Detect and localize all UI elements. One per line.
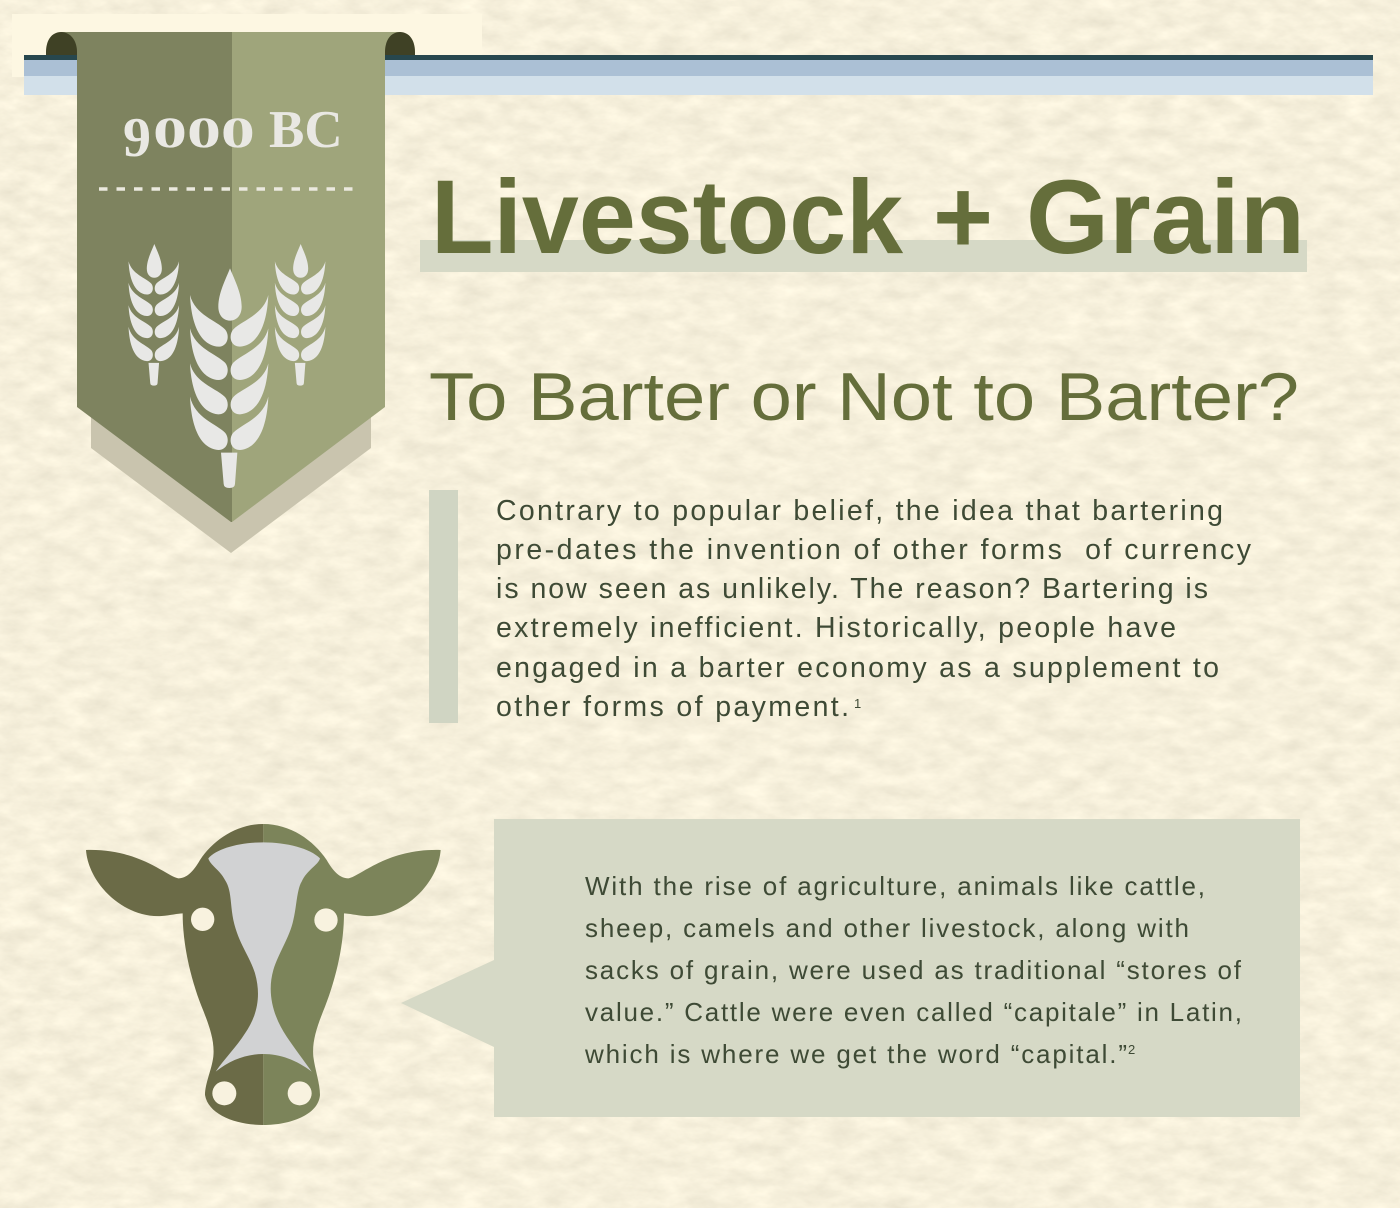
date label: 000 — [153, 109, 255, 157]
banner shadow — [91, 400, 371, 553]
date label: 9 — [123, 107, 151, 169]
title: + — [933, 159, 993, 276]
callout box and pointer — [401, 819, 1300, 1117]
banner: 9000 BC — [46, 32, 415, 553]
icon: wheat — [129, 244, 325, 488]
banner top fold — [61, 32, 401, 55]
cow blaze — [208, 842, 320, 1072]
callout text: 2 — [1128, 1042, 1135, 1057]
text block: bartering: Contrary to popular belief, the idea that bartering — [496, 495, 1223, 527]
banner left half — [77, 32, 232, 522]
dashed divider — [99, 187, 354, 191]
callout text: With the rise of agriculture, animals like cattle, — [585, 871, 1205, 901]
cow left half — [86, 824, 263, 1125]
title highlight — [420, 240, 1307, 272]
title: Grain — [1026, 159, 1305, 276]
text block: bartering: other forms of payment. — [496, 691, 849, 723]
text block: bartering: is now seen as unlikely. The reason? Bartering is — [496, 573, 1208, 605]
text block: bartering: extremely inefficient. Historically, people have — [496, 612, 1176, 644]
text block: bartering: pre-dates the invention of other forms of currency — [496, 534, 1252, 566]
callout — [401, 819, 1300, 1117]
cow eyes and nostrils — [191, 908, 338, 1105]
cow right half — [263, 824, 441, 1125]
title — [431, 159, 1305, 276]
callout text: sheep, camels and other livestock, along with — [585, 913, 1189, 943]
callout text: which is where we get the word “capital.” — [584, 1039, 1127, 1069]
text block: bartering: engaged in a barter economy as a supplement to — [496, 652, 1219, 684]
callout text: sacks of grain, were used as traditional “stores of — [585, 955, 1242, 985]
text block: bartering — [496, 495, 1252, 723]
header strip — [12, 14, 1373, 95]
date label — [123, 101, 343, 169]
banner right half — [232, 32, 385, 522]
title: Livestock — [431, 159, 904, 276]
date label: BC — [269, 101, 343, 159]
accent bar — [429, 490, 458, 723]
callout text: value.” Cattle were even called “capitale” in Latin, — [585, 997, 1242, 1027]
subheading: To Barter or Not to Barter? — [429, 359, 1299, 435]
callout text — [584, 871, 1242, 1069]
banner curls — [46, 32, 415, 55]
icon: cow head — [86, 824, 441, 1125]
text block: bartering: 1 — [854, 696, 861, 711]
